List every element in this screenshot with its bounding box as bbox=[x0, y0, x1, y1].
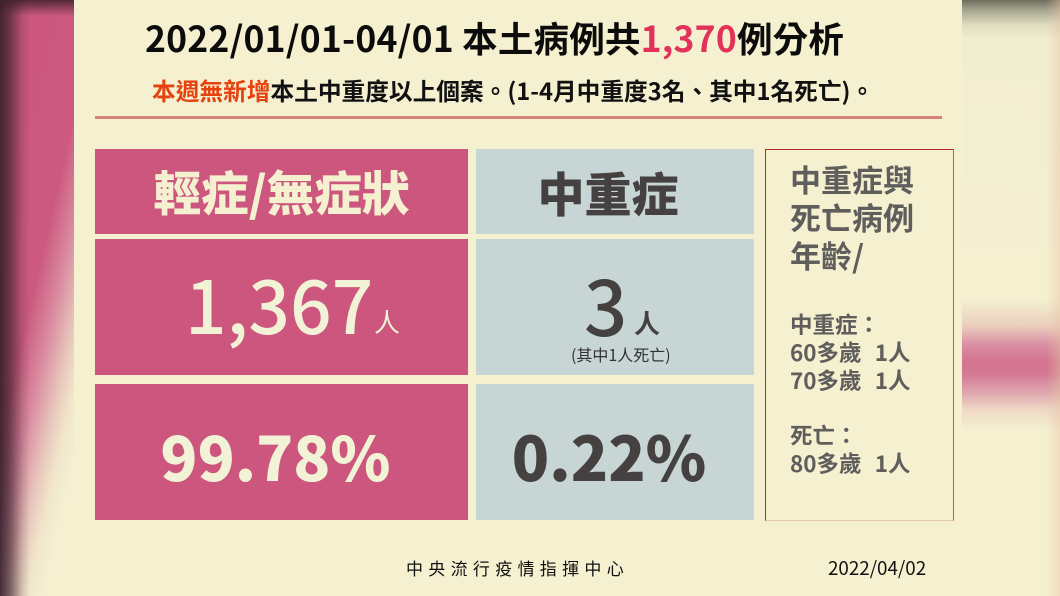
divider line bbox=[95, 116, 942, 119]
case count: mild: 人 bbox=[374, 303, 400, 340]
date: 2022/04/02 bbox=[828, 554, 926, 581]
percent: mild: 99.78% bbox=[160, 410, 391, 499]
percent: severe: 0.22% bbox=[512, 410, 706, 499]
severe ages: 60多歲 1人 bbox=[790, 336, 911, 368]
death ages bbox=[790, 419, 911, 479]
heading: severe bbox=[476, 149, 754, 234]
death ages: 80多歲 1人 bbox=[790, 447, 911, 479]
case count: severe: 3 bbox=[584, 248, 627, 358]
severe ages bbox=[790, 308, 911, 396]
panel: mild or asymptomatic bbox=[95, 149, 468, 520]
panel heading: 中重症與 bbox=[790, 156, 914, 201]
blurred background: right edge bbox=[962, 0, 1060, 596]
severe ages: 70多歲 1人 bbox=[790, 364, 911, 396]
panel heading: 死亡病例 bbox=[790, 194, 914, 239]
heading: mild bbox=[95, 149, 468, 234]
case count: severe: (其中1人死亡) bbox=[571, 342, 671, 366]
blurred background: left edge bbox=[0, 0, 74, 596]
case count: severe: 人 bbox=[634, 304, 660, 341]
percent: severe bbox=[476, 384, 754, 520]
subtitle: 本週無新增本土中重度以上個案。(1-4月中重度3名、其中1名死亡)。 bbox=[152, 73, 874, 107]
case count: mild bbox=[95, 239, 468, 375]
case count: severe bbox=[476, 239, 754, 375]
title: 2022/01/01-04/01 本土病例共1,370例分析 bbox=[145, 12, 844, 63]
heading: severe: 中重症 bbox=[538, 157, 678, 226]
panel: ages of severe and fatal cases bbox=[765, 149, 954, 521]
death ages: 死亡： bbox=[790, 419, 858, 451]
panel: moderate and severe bbox=[476, 149, 754, 520]
panel heading: 年齡/ bbox=[790, 232, 864, 277]
case count: mild: 1,367 bbox=[185, 250, 373, 356]
panel heading bbox=[790, 156, 914, 277]
severe ages: 中重症： bbox=[790, 308, 880, 340]
source: 中央流行疫情指揮中心 bbox=[406, 555, 629, 580]
percent: mild bbox=[95, 384, 468, 520]
heading: mild: 輕症/無症狀 bbox=[154, 156, 409, 225]
